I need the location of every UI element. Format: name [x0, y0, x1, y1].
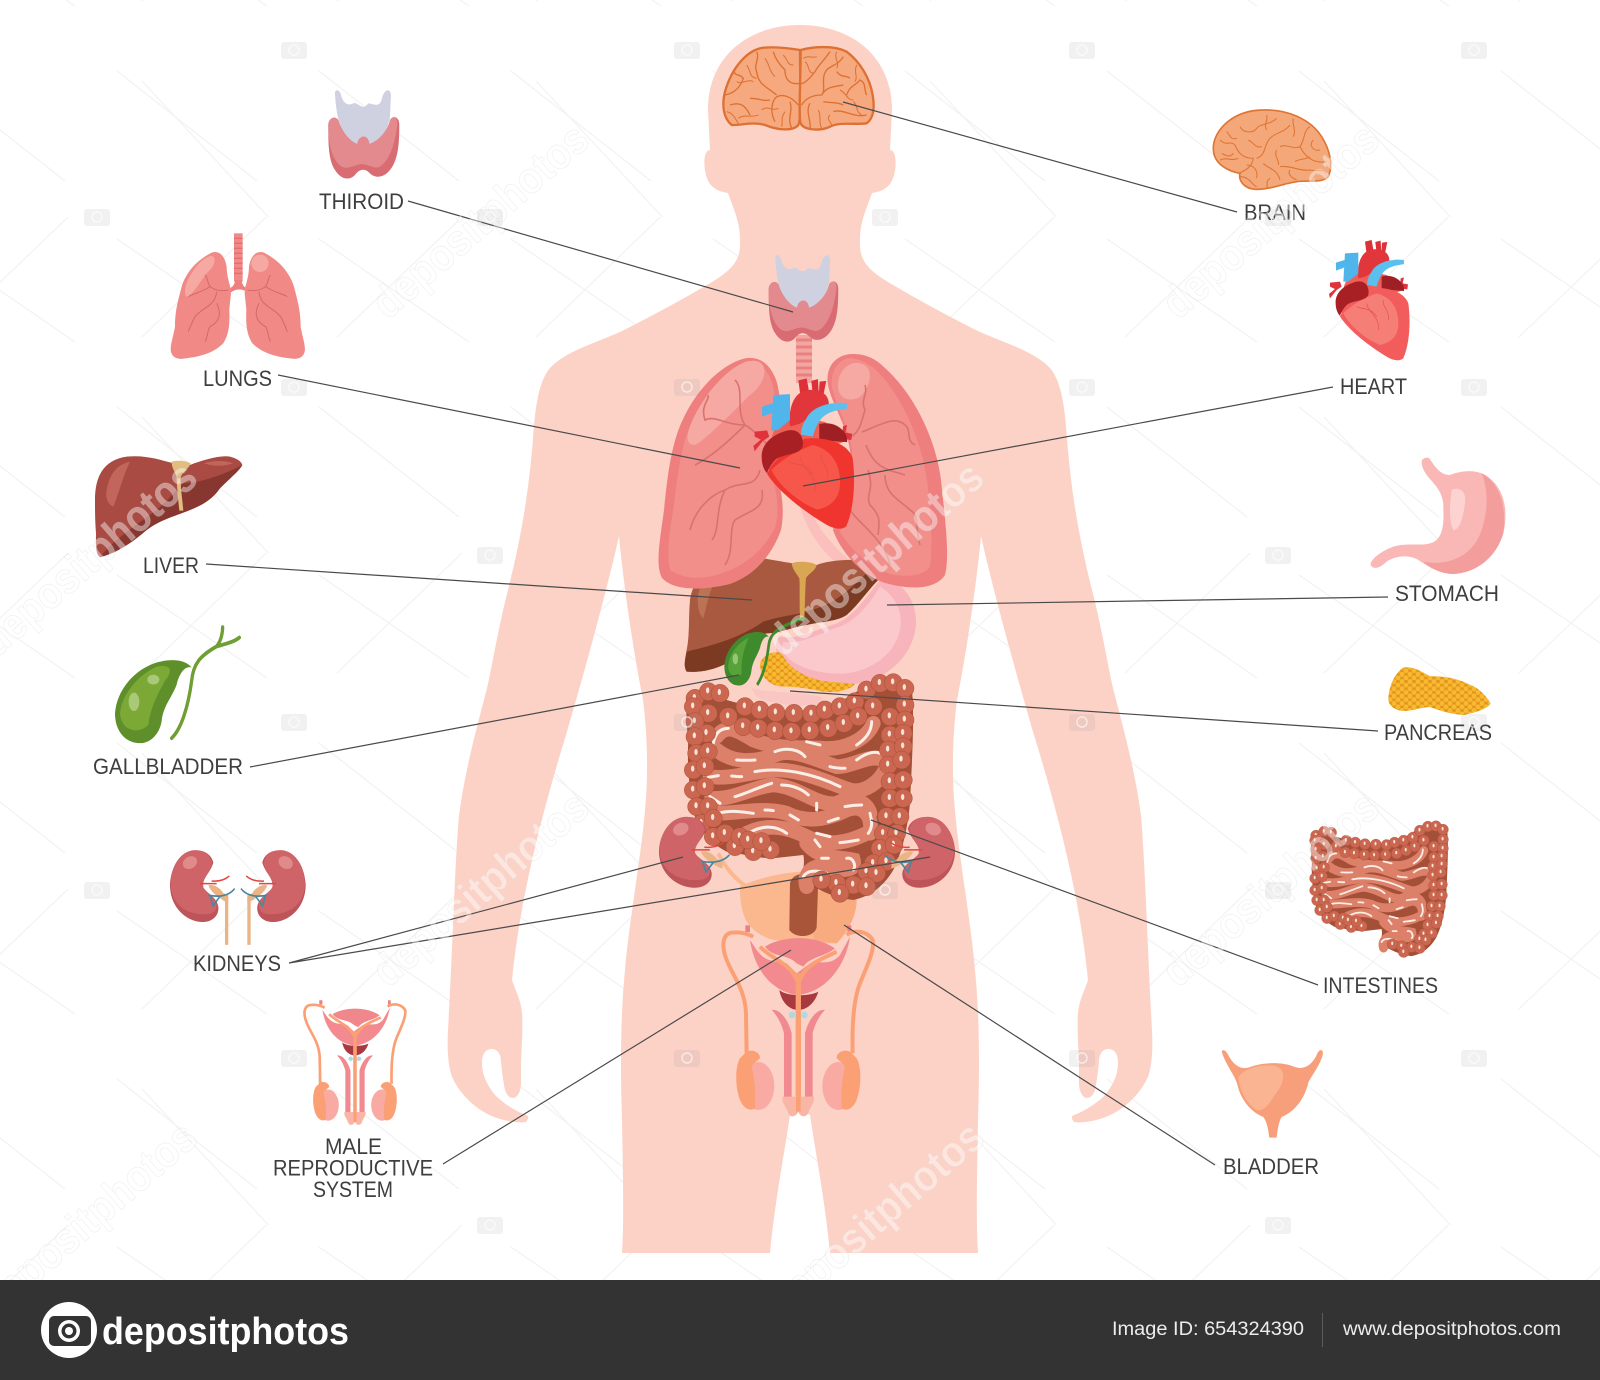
organ: body bladder and rectum: [718, 853, 857, 943]
organ: body intestines: [684, 674, 914, 902]
organ: body kidney left: [659, 817, 729, 888]
watermark pattern: depositphotos: [1153, 782, 1388, 996]
watermark pattern: depositphotos: [363, 114, 598, 328]
icon: intestines: [1310, 821, 1448, 957]
icon: stomach: [1371, 458, 1506, 574]
icon: pancreas: [1388, 667, 1491, 715]
organ: body trachea: [796, 335, 812, 383]
icon: heart: [1329, 240, 1410, 360]
label: gallbladder: GALLBLADDER: [93, 754, 243, 779]
label: thyroid: THIROID: [319, 189, 404, 214]
label: male reproductive system: [273, 1134, 433, 1202]
icon: lungs: [171, 233, 305, 359]
label: male reproductive system: REPRODUCTIVE: [273, 1156, 433, 1180]
footer website: www.depositphotos.com: [1342, 1319, 1561, 1340]
label: male reproductive system: SYSTEM: [313, 1177, 393, 1202]
organ: body kidney right: [885, 817, 955, 888]
icon: thyroid: [328, 90, 399, 179]
icon: kidneys: [170, 850, 306, 945]
watermark pattern: depositphotos: [758, 1112, 993, 1326]
organ: body lungs: [658, 354, 947, 589]
label: kidneys: KIDNEYS: [193, 951, 281, 976]
label: pancreas: PANCREAS: [1384, 720, 1492, 745]
organ: body liver: [685, 557, 883, 672]
organ: body male reproductive system: [723, 925, 873, 1116]
leader lines: [206, 102, 1388, 1165]
footer brand name: depositphotos: [102, 1311, 349, 1353]
organ: body gallbladder: [724, 618, 805, 686]
label: intestines: INTESTINES: [1323, 973, 1438, 998]
label: male reproductive system: MALE: [325, 1134, 382, 1159]
icon: male reproductive system: [304, 1000, 405, 1125]
organ: body esophagus: [800, 507, 853, 563]
organ: body stomach: [750, 577, 916, 706]
organ: body thyroid: [769, 255, 838, 342]
watermark pattern: depositphotos: [758, 452, 993, 666]
organ: body pancreas: [760, 652, 855, 692]
icon: brain: [1213, 110, 1331, 189]
organ: body brain: [723, 47, 874, 130]
watermark pattern: depositphotos: [1153, 114, 1388, 328]
label: heart: HEART: [1340, 374, 1407, 399]
label: liver: LIVER: [143, 553, 199, 578]
human body silhouette: [448, 25, 1152, 1253]
icon: footer camera logo: [41, 1302, 97, 1358]
label: bladder: BLADDER: [1223, 1154, 1319, 1179]
watermark pattern: depositphotos: [363, 782, 598, 996]
label: lungs: LUNGS: [203, 366, 272, 391]
icon: bladder: [1222, 1050, 1323, 1138]
icon: gallbladder: [115, 627, 239, 743]
footer image id: Image ID: 654324390: [1112, 1319, 1304, 1340]
footer bar: [0, 1280, 1600, 1380]
icon: liver: [95, 456, 242, 557]
label: brain: BRAIN: [1244, 200, 1306, 225]
label: stomach: STOMACH: [1395, 581, 1499, 606]
organ: body heart: [753, 378, 854, 529]
